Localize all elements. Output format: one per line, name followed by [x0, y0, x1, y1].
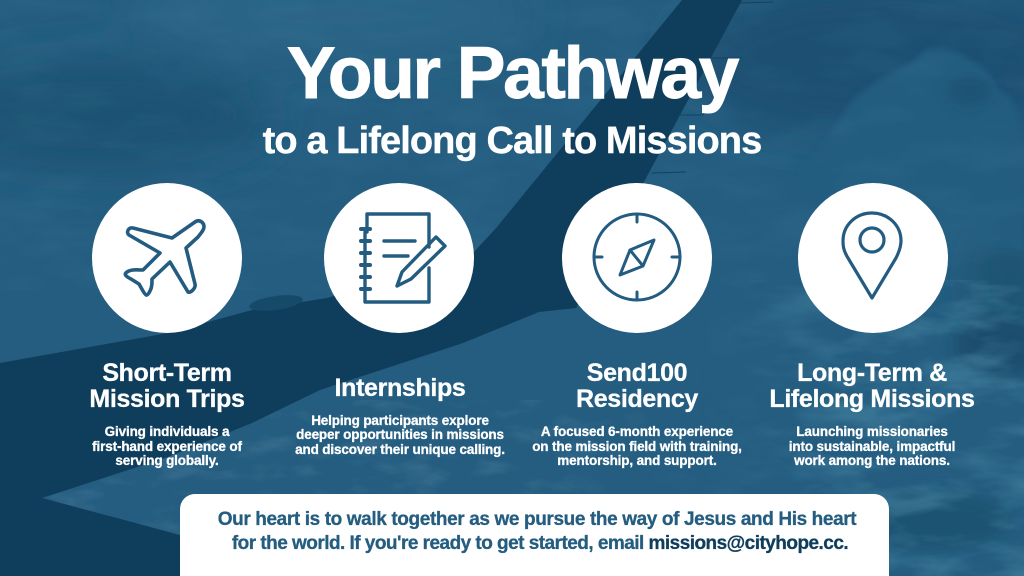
heading: Send100 — [587, 359, 687, 387]
description: and discover their unique calling. — [295, 442, 505, 457]
description: into sustainable, impactful — [789, 439, 955, 454]
heading: Long-Term & — [797, 359, 947, 387]
wing and tail fin silhouette — [0, 0, 742, 576]
callout panel — [180, 494, 889, 576]
column: send100 residency — [532, 359, 742, 468]
heading: Short-Term — [102, 359, 232, 387]
callout text — [218, 508, 856, 554]
description: deeper opportunities in missions — [296, 427, 504, 442]
description — [92, 424, 242, 468]
description: serving globally. — [115, 453, 219, 468]
heading — [89, 359, 245, 413]
description: A focused 6-month experience — [541, 424, 733, 439]
description — [295, 412, 505, 458]
heading — [769, 359, 975, 413]
subtitle: to a Lifelong Call to Missions — [263, 120, 761, 162]
description: first-hand experience of — [92, 439, 242, 454]
callout text: Our heart is to walk together as we pursue the way of Jesus and His heart — [218, 508, 856, 530]
heading: Mission Trips — [89, 385, 245, 413]
heading: Lifelong Missions — [769, 385, 975, 413]
title: Your Pathway — [287, 33, 737, 114]
icon: airplane — [92, 183, 242, 333]
icon: location pin — [798, 183, 948, 333]
description: Launching missionaries — [796, 424, 948, 439]
column: short-term mission trips — [89, 359, 245, 468]
column: long-term and lifelong missions — [769, 359, 975, 468]
description — [532, 424, 742, 468]
callout text: for the world. If you're ready to get started, email missions@cityhope.cc. — [232, 532, 848, 554]
description: Helping participants explore — [311, 412, 489, 428]
heading — [576, 359, 698, 413]
description: work among the nations. — [794, 453, 950, 468]
description: Giving individuals a — [105, 424, 229, 439]
icon: notebook and pen — [324, 183, 474, 333]
heading: Internships — [335, 374, 465, 402]
description: mentorship, and support. — [557, 453, 717, 468]
icon: compass — [562, 183, 712, 333]
heading: Residency — [576, 385, 698, 413]
column: internships — [295, 374, 505, 458]
description — [789, 424, 955, 468]
description: on the mission field with training, — [532, 439, 742, 454]
